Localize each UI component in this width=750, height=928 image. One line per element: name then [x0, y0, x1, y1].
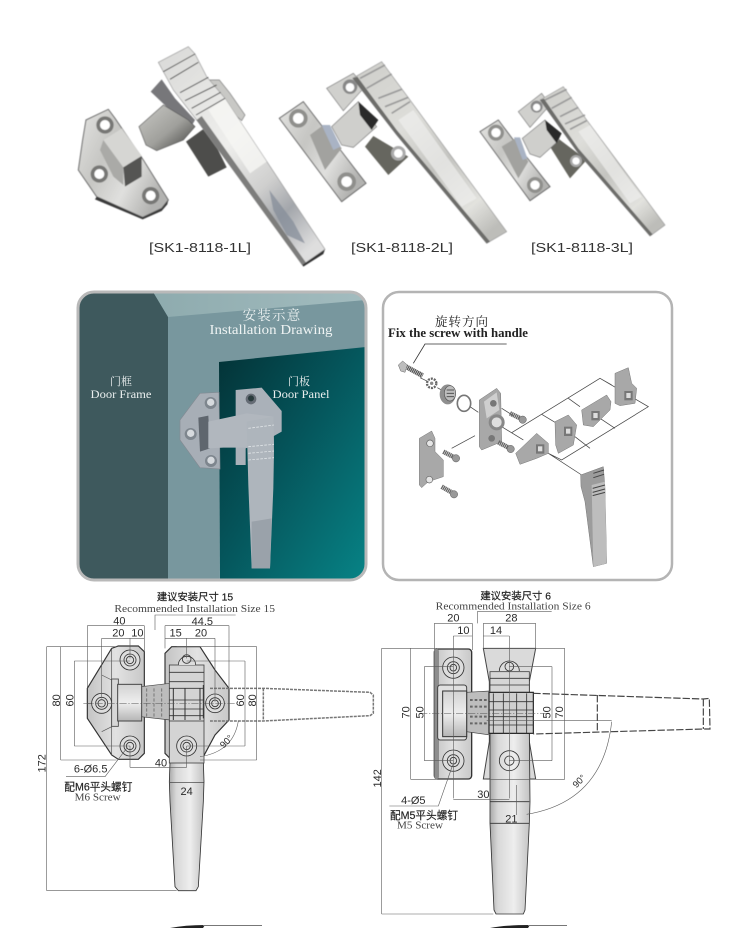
handle: [353, 62, 507, 243]
label: door frame: Door Frame: [90, 387, 152, 401]
dimension numbers: 40: [155, 758, 167, 770]
dimension lines: [47, 615, 257, 891]
rotating cam: [139, 105, 195, 151]
label: door frame: 门框: [110, 374, 132, 388]
product photo: SK1-8118-2L latch: [279, 62, 507, 243]
dimension lines: [382, 612, 612, 914]
panel: product photo row: [78, 47, 665, 267]
screw note M5: 配M5平头螺钉: [390, 810, 458, 822]
label: SK1-8118-3L: [SK1-8118-3L]: [531, 240, 633, 255]
heading: installation drawing: [210, 307, 333, 337]
cam variant 3: [582, 395, 611, 427]
label: door frame: [90, 374, 152, 401]
screw note M5: [390, 810, 458, 832]
label: door panel: [272, 374, 330, 401]
latch body: [434, 648, 536, 914]
dimension numbers: 28: [505, 613, 517, 625]
rotating cam: [522, 120, 559, 157]
screw note M6: M6 Screw: [75, 793, 122, 804]
dimension numbers: 60: [64, 694, 76, 706]
dimension numbers: 50: [414, 706, 426, 718]
hinge plate: [479, 388, 505, 450]
panel scene background: [78, 292, 366, 580]
dimension drawing: size 6 latch: [372, 589, 710, 914]
dimension numbers: 20: [447, 613, 459, 625]
dimension numbers: 80: [247, 694, 259, 706]
dimension numbers: 20: [112, 627, 124, 639]
heading: recommended size 15: 建议安装尺寸 15: [157, 591, 233, 604]
panel border and background: [383, 292, 672, 580]
next section stub: left: [170, 925, 262, 928]
striker bracket: [419, 431, 443, 488]
handle: [158, 47, 325, 267]
dimension numbers: [372, 613, 588, 825]
screw: [398, 361, 423, 376]
panel: installation drawing: [78, 292, 366, 580]
heading: recommended size 15: [114, 591, 276, 615]
label: door panel: 门板: [288, 374, 310, 388]
assembly guide lines: [420, 378, 648, 475]
dimension numbers: [37, 615, 259, 798]
dimension numbers: 44.5: [192, 616, 213, 628]
panel border: [78, 292, 366, 580]
screw note M6: [64, 781, 133, 804]
centre line: [83, 702, 237, 704]
screws: [442, 413, 522, 493]
illustration: mounted latch: [180, 388, 282, 568]
centre line: [420, 713, 550, 715]
next section stub: right: [490, 925, 567, 928]
back plate: [518, 93, 587, 178]
mounting holes: [92, 650, 224, 756]
dimension numbers: 40: [113, 615, 125, 627]
dimension numbers: 70: [401, 706, 413, 718]
handle: [581, 467, 607, 567]
striker base plate: [279, 102, 366, 202]
dimension numbers: 24: [181, 786, 193, 798]
cam variant 2: [555, 415, 577, 453]
dimension numbers: 142: [372, 769, 384, 787]
dimension drawing: size 15 latch: [37, 591, 373, 891]
heading: screw direction: [388, 314, 528, 340]
dimension numbers: 90°: [571, 772, 588, 790]
leader line: [413, 344, 507, 363]
label: SK1-8118-2L: [SK1-8118-2L]: [351, 240, 453, 255]
product photo: SK1-8118-1L latch: [78, 47, 325, 267]
dimension numbers: 15: [170, 627, 182, 639]
dimension numbers: 4-Ø5: [401, 795, 426, 807]
dimension numbers: 21: [505, 813, 517, 825]
bushing: [440, 384, 456, 404]
heading: recommended size 15: Recommended Installation Size 15: [114, 603, 276, 615]
screw note M6: 配M6平头螺钉: [64, 781, 133, 793]
panel: exploded assembly: [383, 292, 672, 580]
striker base plate: [78, 109, 168, 219]
cam variant 1: [516, 433, 548, 464]
star washer: [427, 379, 436, 388]
heading: screw direction: 旋转方向: [435, 314, 489, 329]
mounting holes: [443, 657, 519, 771]
dimension numbers: 90°: [218, 733, 235, 750]
label: SK1-8118-1L: [SK1-8118-1L]: [149, 240, 251, 255]
dimension numbers: 30: [477, 789, 489, 801]
back plate: [327, 73, 408, 175]
heading: recommended size 6: 建议安装尺寸 6: [480, 589, 551, 602]
product photo: SK1-8118-3L latch: [480, 87, 665, 236]
heading: recommended size 6: [436, 589, 591, 612]
dimension numbers: 172: [37, 754, 49, 772]
retaining ring: [457, 395, 471, 411]
label: door panel: Door Panel: [272, 387, 330, 401]
dimension numbers: 6-Ø6.5: [74, 764, 107, 776]
exploded parts diagram: [398, 344, 648, 567]
back plate of handle: [151, 79, 245, 177]
dimension numbers: 20: [195, 627, 207, 639]
heading: screw direction: Fix the screw with handle: [388, 325, 528, 340]
dimension numbers: 50: [541, 706, 553, 718]
dimension numbers: 70: [554, 706, 566, 718]
opened handle, dashed: [210, 688, 373, 721]
opened handle, dashed: [533, 693, 710, 734]
dimension numbers: 10: [131, 627, 143, 639]
latch body: [87, 646, 229, 891]
heading: installation drawing: 安装示意: [243, 307, 301, 323]
screw note M5: M5 Screw: [397, 821, 444, 832]
dimension numbers: 10: [457, 625, 469, 637]
rotating cam: [332, 102, 377, 147]
dimension numbers: 14: [490, 625, 502, 637]
dimension numbers: 60: [235, 694, 247, 706]
heading: recommended size 6: Recommended Installation Size 6: [436, 600, 591, 612]
striker base plate: [480, 120, 550, 201]
handle: [540, 87, 665, 236]
cam variant 4: [615, 368, 637, 406]
heading: installation drawing: Installation Drawing: [210, 322, 333, 337]
dimension numbers: 80: [51, 694, 63, 706]
